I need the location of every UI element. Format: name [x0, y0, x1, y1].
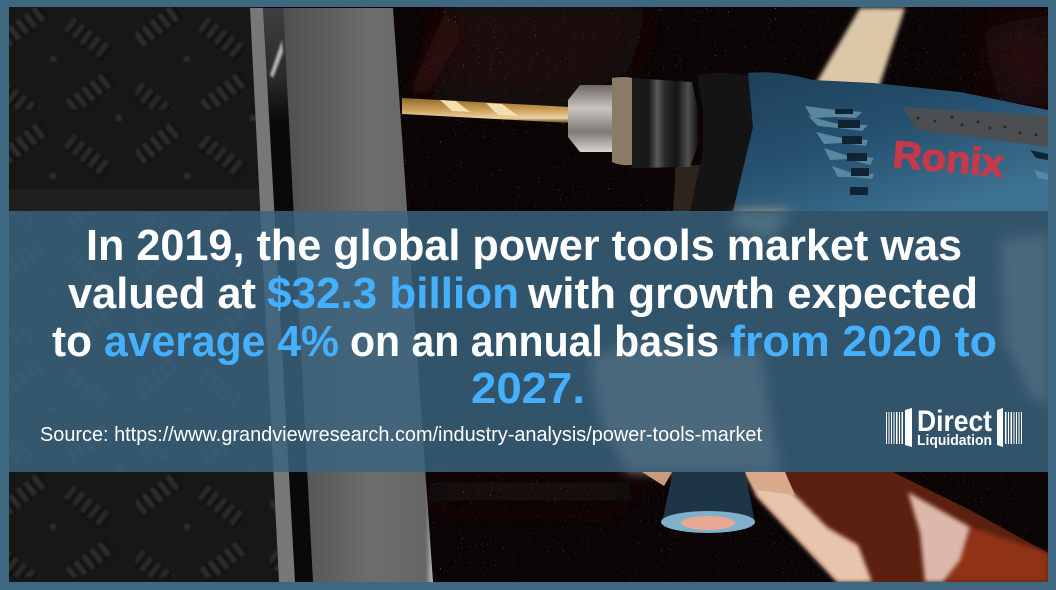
textured dark panel: [0, 0, 295, 590]
blue body: [733, 72, 1048, 211]
headline line 2: valued at: [68, 269, 256, 318]
brand lettering: Ronix: [891, 134, 1005, 186]
sawdust specks: [400, 0, 1056, 590]
source line: Source: https://www.grandviewresearch.com/industry-analysis/power-tools-market: [40, 423, 762, 446]
logo right barcode and door: [997, 408, 1022, 447]
drill: [402, 72, 1048, 212]
logo left barcode and door: [886, 408, 912, 447]
collar: [690, 73, 754, 212]
drill bit: [402, 98, 570, 123]
headline line 3: on an annual basis: [350, 317, 719, 366]
dark reddish glow in the backdrop: [430, 0, 1056, 505]
vents: [805, 106, 1048, 195]
headline line 3: from 2020 to: [730, 317, 997, 366]
headline line 2: $32.3 billion: [267, 269, 519, 318]
black chuck rings: [632, 78, 698, 168]
logo: Direct Liquidation: Liquidation: [917, 432, 992, 449]
logo wordmark: Direct: [917, 405, 992, 438]
text band: [9, 211, 1048, 472]
red wedge by the bar: [408, 8, 462, 95]
hand behind band: [590, 211, 1048, 472]
bracket below collar: [673, 165, 700, 212]
grip: [903, 107, 1048, 147]
headline: [52, 221, 997, 413]
headline line 3: to: [52, 317, 92, 366]
headline line 3: average 4%: [104, 317, 339, 366]
headline line 4: 2027.: [471, 364, 585, 413]
cream stripe behind drill: [812, 8, 905, 90]
drill handle base: [642, 472, 795, 533]
silver chuck tip: [568, 85, 625, 152]
headline line 2: with growth expected: [527, 269, 978, 318]
steel bar: [250, 8, 433, 582]
forearm: [745, 472, 1048, 582]
logo: Direct Liquidation: [886, 405, 1022, 449]
headline line 1: In 2019, the global power tools market was: [86, 221, 962, 270]
